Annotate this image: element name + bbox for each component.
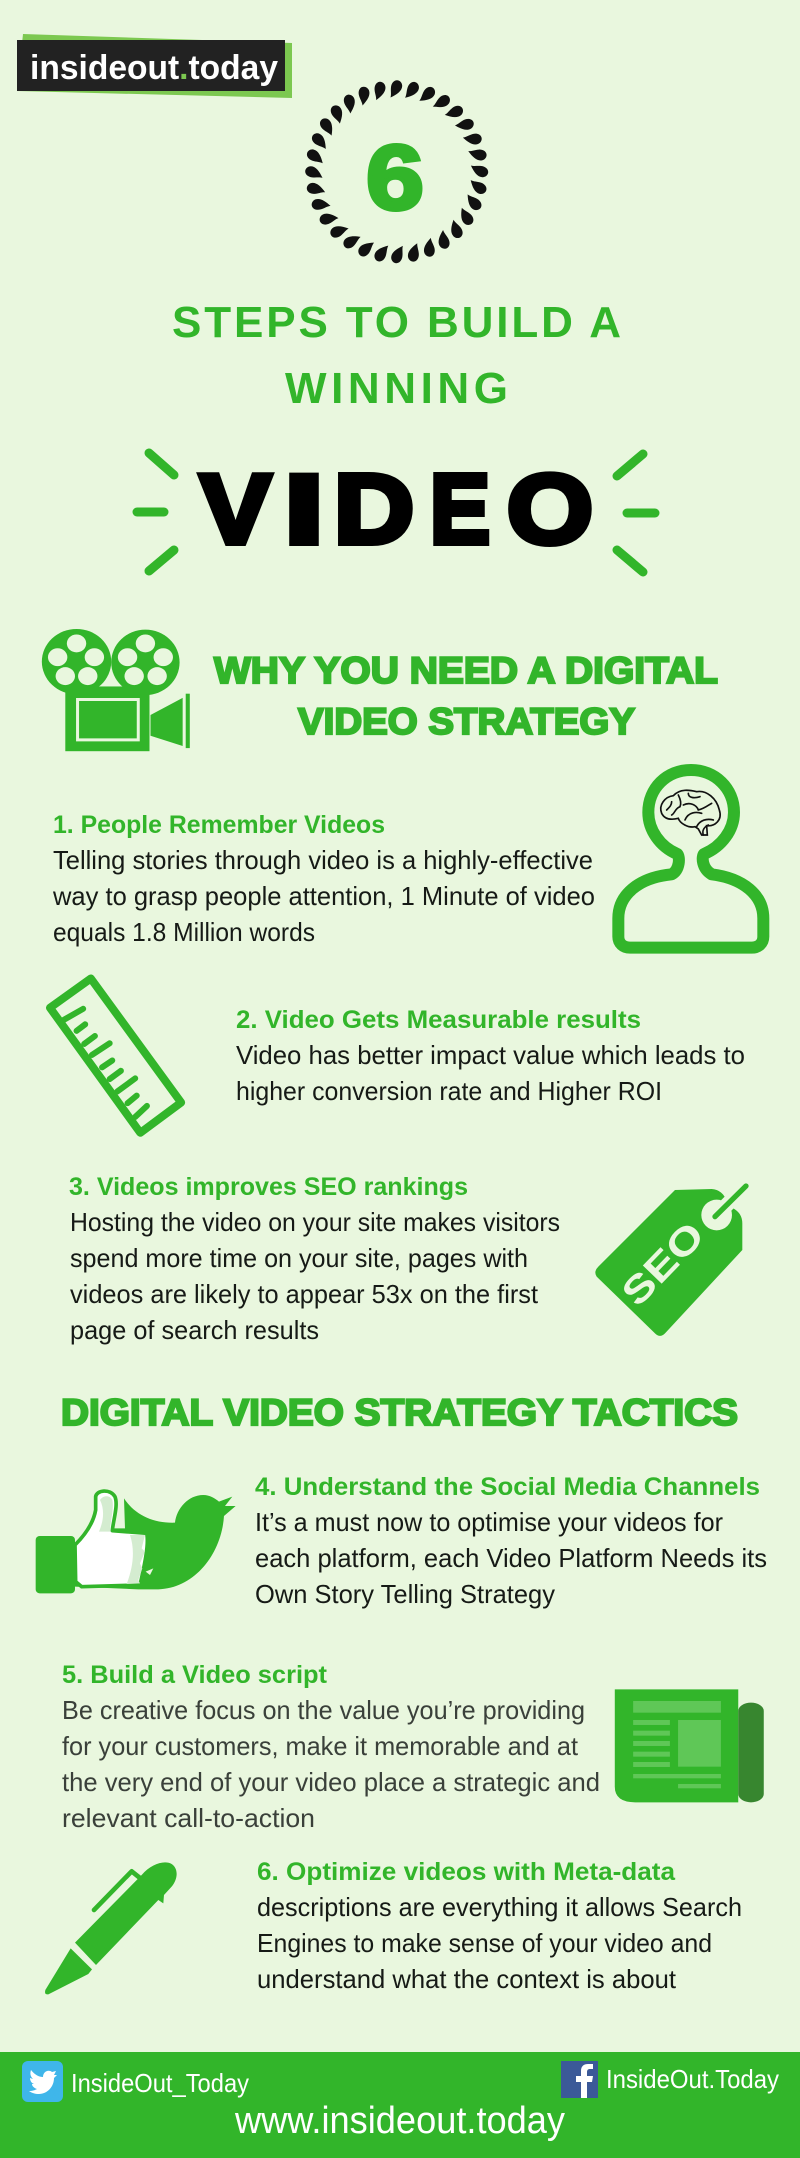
title word: VIDEO with rays (137, 453, 655, 572)
icon: facebook (561, 2061, 598, 2098)
icon: ruler (50, 979, 181, 1133)
panel: step 5 text: the very end of your video place a strategic and (62, 1767, 600, 1797)
panel: step 4 text (255, 1473, 767, 1609)
icon: head with brain (618, 770, 763, 948)
heading: digital video strategy tactics: DIGITAL VIDEO STRATEGY TACTICS (61, 1392, 738, 1433)
icon: SEO tag: SEO (614, 1214, 713, 1315)
panel: step 5 text: 5. Build a Video script (62, 1661, 328, 1689)
title: WINNING (285, 364, 508, 413)
title word: VIDEO with rays: D (334, 454, 414, 564)
panel: step 1 text: way to grasp people attention, 1 Minute of video (52, 881, 595, 911)
title: STEPS TO BUILD A (172, 298, 621, 347)
icon: ring of drops with number 6: 6 (366, 127, 424, 229)
panel: step 4 text: Own Story Telling Strategy (255, 1579, 555, 1609)
panel: step 3 text: 3. Videos improves SEO rankings (69, 1173, 468, 1201)
icon: movie camera (42, 629, 190, 751)
twitter handle: InsideOut_Today (71, 2068, 249, 2098)
icon: twitter (22, 2061, 63, 2102)
panel: step 6 text: understand what the context is about (257, 1964, 677, 1994)
logo: insideout.today: insideout.today (30, 49, 278, 87)
panel: step 2 text (236, 1006, 745, 1106)
panel: step 2 text: higher conversion rate and Higher ROI (236, 1076, 662, 1106)
footer band (0, 2052, 800, 2158)
heading: why you need a digital video strategy: WHY YOU NEED A DIGITAL (214, 650, 718, 691)
panel: step 6 text: descriptions are everything it allows Search (257, 1892, 742, 1922)
panel: step 5 text: relevant call-to-action (62, 1803, 315, 1833)
title word: VIDEO with rays: I (284, 454, 324, 564)
panel: step 4 text: each platform, each Video Platform Needs its (255, 1543, 767, 1573)
heading: why you need a digital video strategy: VIDEO STRATEGY (298, 701, 635, 742)
panel: step 3 text (69, 1173, 560, 1345)
panel: step 6 text (257, 1858, 742, 1994)
panel: step 3 text: spend more time on your site, pages with (70, 1243, 528, 1273)
title word: VIDEO with rays: E (430, 454, 490, 564)
panel: step 6 text: Engines to make sense of your video and (257, 1928, 712, 1958)
facebook handle: InsideOut.Today (606, 2064, 779, 2094)
panel: step 1 text: 1. People Remember Videos (53, 811, 385, 839)
icon: pen (45, 1862, 177, 1994)
icon: newspaper (615, 1689, 764, 1802)
panel: step 5 text (62, 1661, 600, 1833)
icon: SEO tag (595, 1186, 746, 1336)
title word: VIDEO with rays: V (200, 454, 271, 564)
panel: step 1 text: equals 1.8 Million words (53, 917, 315, 947)
panel: step 1 text: Telling stories through video is a highly-effective (53, 845, 593, 875)
icon: thumbs up and bird (36, 1491, 236, 1593)
title (172, 298, 621, 413)
logo: insideout.today (17, 34, 292, 98)
panel: step 2 text: Video has better impact value which leads to (236, 1040, 745, 1070)
panel: step 5 text: Be creative focus on the value you’re providing (62, 1695, 585, 1725)
panel: step 4 text: 4. Understand the Social Media Channels (255, 1473, 760, 1501)
website url: www.insideout.today (234, 2100, 565, 2142)
panel: step 3 text: videos are likely to appear 53x on the first (70, 1279, 539, 1309)
panel: step 3 text: Hosting the video on your site makes visitors (70, 1207, 560, 1237)
heading: why you need a digital video strategy (214, 650, 718, 742)
panel: step 2 text: 2. Video Gets Measurable results (236, 1006, 641, 1034)
panel: step 3 text: page of search results (70, 1315, 319, 1345)
panel: step 1 text (52, 811, 595, 947)
icon: ring of drops with number 6 (305, 80, 488, 263)
panel: step 5 text: for your customers, make it memorable and at (62, 1731, 579, 1761)
title word: VIDEO with rays: O (507, 454, 593, 564)
panel: step 4 text: It’s a must now to optimise your videos for (255, 1507, 723, 1537)
panel: step 6 text: 6. Optimize videos with Meta-data (257, 1858, 676, 1886)
